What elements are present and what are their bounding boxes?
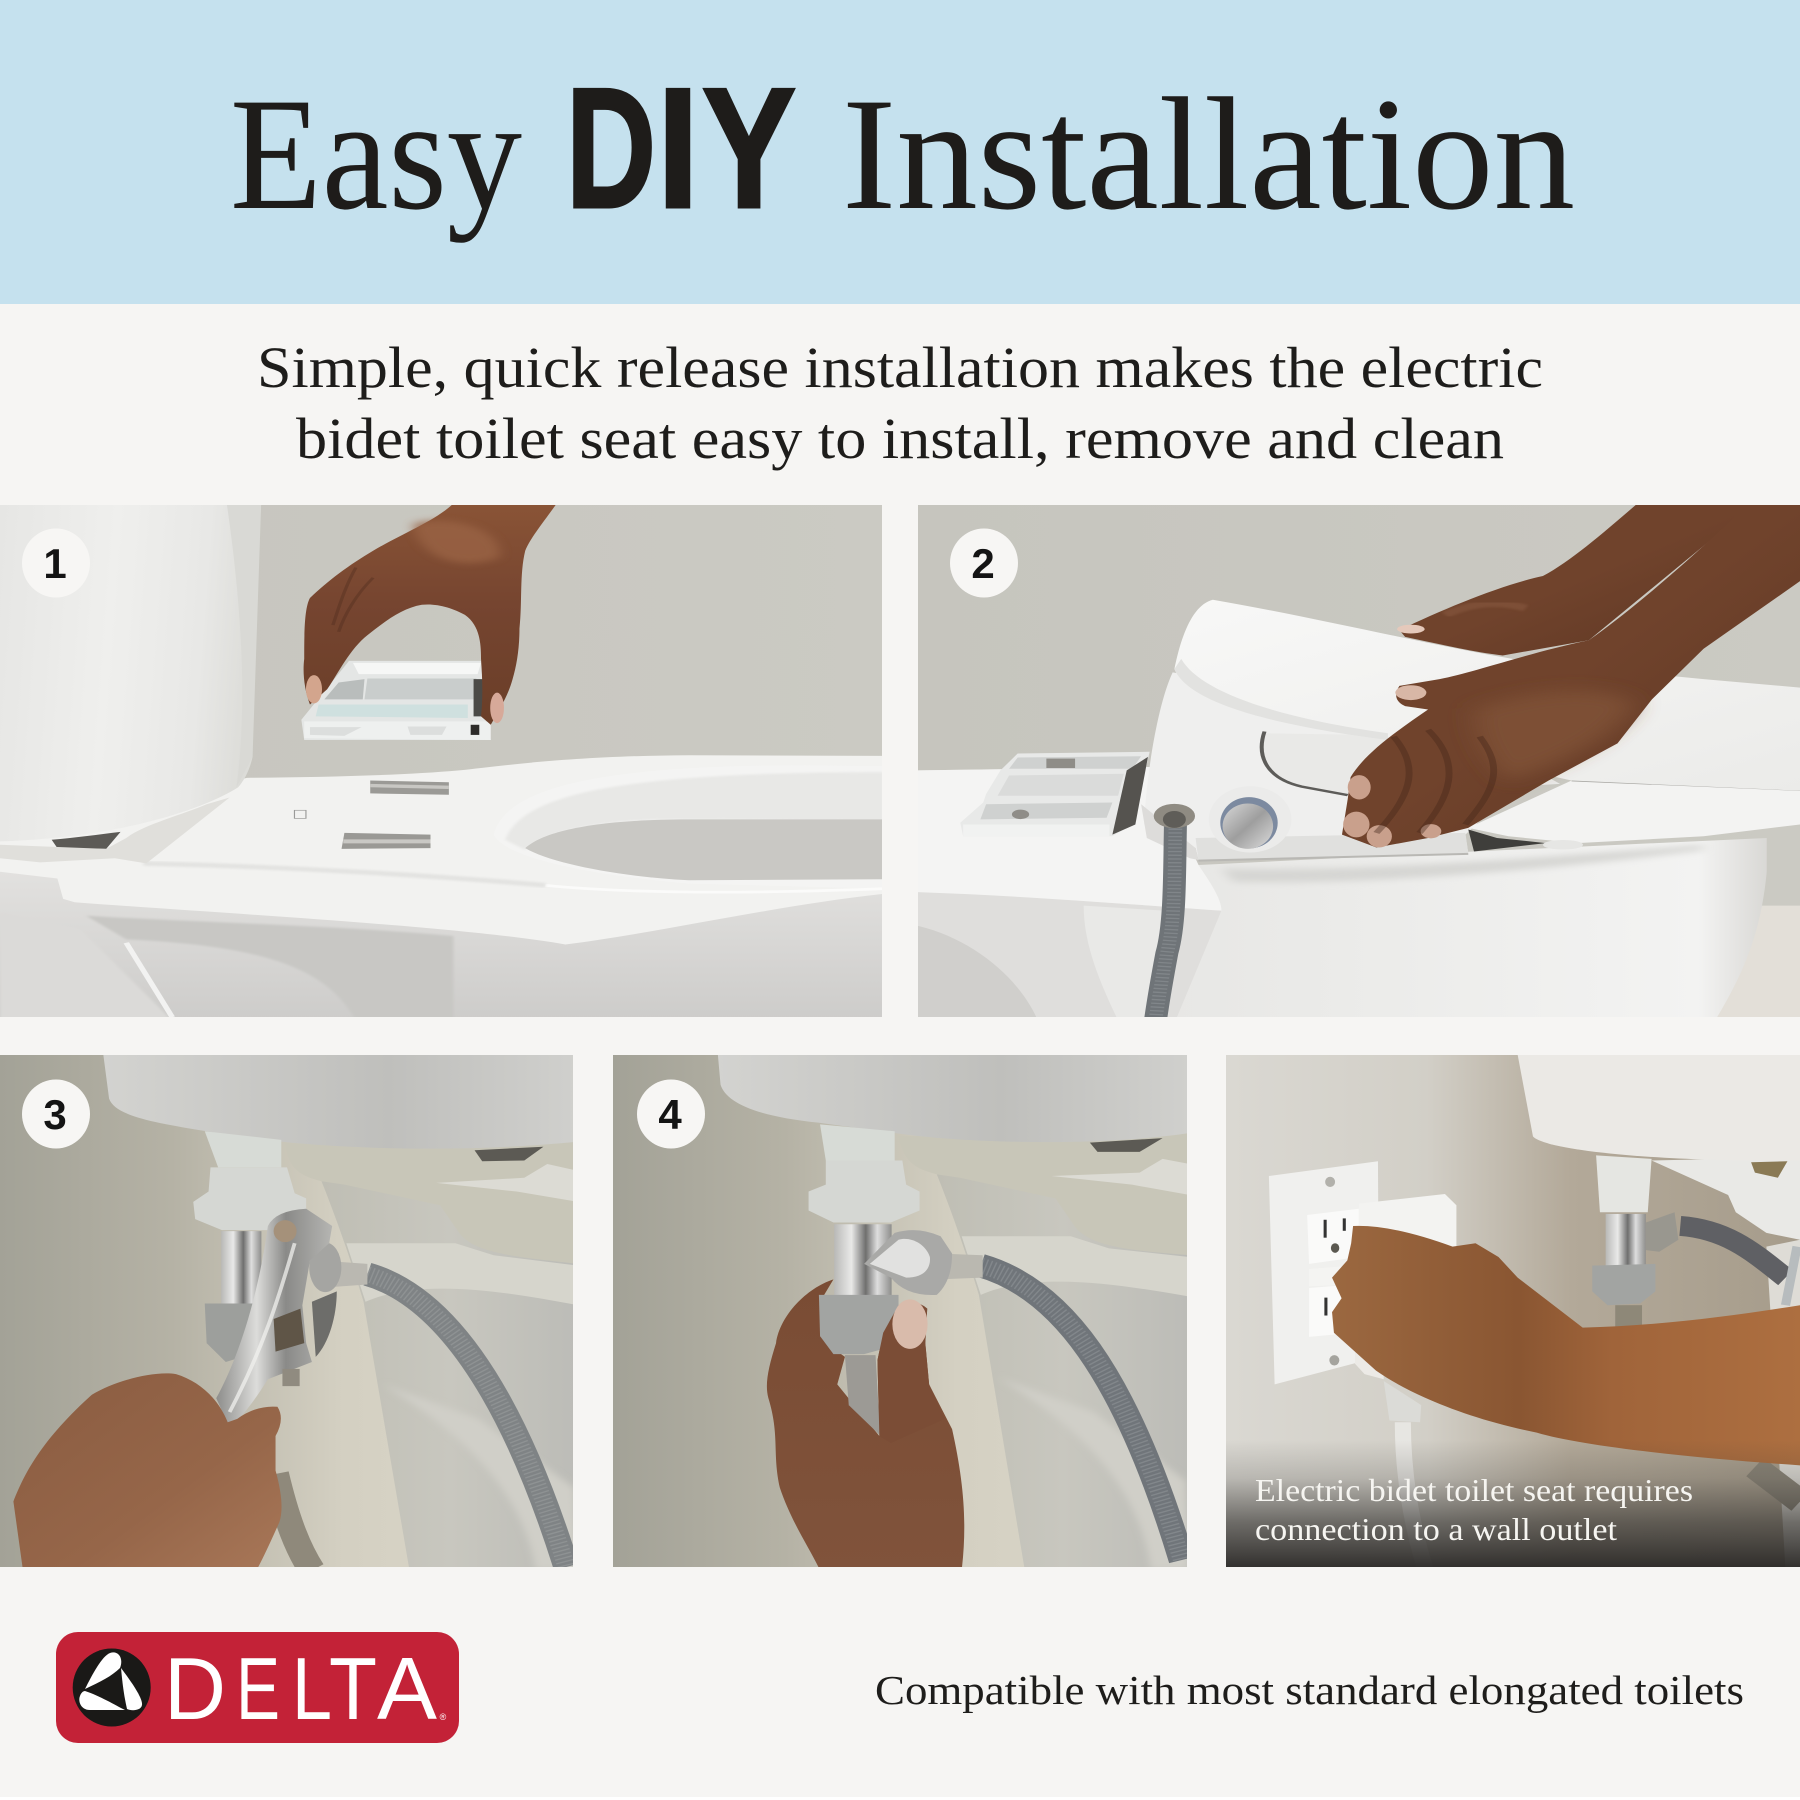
toilet tank — [0, 503, 261, 841]
thumb and nail — [878, 1300, 931, 1436]
caption gradient — [1226, 1440, 1800, 1567]
toilet tank — [103, 1055, 578, 1149]
adjustable wrench — [216, 1209, 341, 1427]
title: D — [566, 53, 656, 244]
braided hose — [276, 1260, 566, 1570]
panel: step 3 photo — [0, 1055, 578, 1570]
bracket held in hand — [301, 661, 491, 740]
step 4 number badge: 4 — [658, 1091, 682, 1138]
front hand and arm — [1342, 503, 1800, 847]
bracket on deck — [960, 752, 1150, 836]
title: Y — [702, 53, 796, 244]
toilet pedestal and deck — [322, 1142, 573, 1567]
panel: step 5 photo with caption — [1226, 1055, 1800, 1570]
title: Installation — [842, 65, 1575, 243]
logo wordmark: E — [236, 1639, 280, 1738]
title: Easy — [230, 65, 522, 243]
logo wordmark — [164, 1639, 437, 1738]
baseboard — [1718, 906, 1800, 1017]
subtitle: Simple, quick release installation makes the electric — [257, 335, 1543, 400]
seat housing — [1141, 672, 1589, 861]
step 2 number badge — [950, 528, 1018, 598]
title: I — [657, 53, 699, 244]
seat rim and lid — [1174, 600, 1800, 852]
hand gripping wrench — [13, 1373, 282, 1570]
caption text: connection to a wall outlet — [1255, 1511, 1617, 1547]
hand and forearm — [1332, 1226, 1800, 1465]
wall outlet — [1269, 1161, 1379, 1384]
logo wordmark: L — [292, 1639, 332, 1738]
toilet pedestal and deck — [936, 1134, 1187, 1567]
bottom edge strip — [0, 1797, 1800, 1800]
title — [230, 53, 1575, 244]
panel: step 2 photo — [918, 503, 1800, 1021]
braided hose — [939, 1254, 1182, 1560]
step 4 number badge — [637, 1080, 705, 1148]
caption text — [1256, 1478, 1692, 1540]
step 1 number badge — [22, 528, 90, 598]
logo wordmark: T — [329, 1639, 377, 1738]
logo emblem — [73, 1648, 151, 1726]
toilet body — [918, 767, 1767, 1021]
toilet deck and bowl — [0, 755, 884, 1021]
valve fittings — [193, 1131, 306, 1362]
Delta logo — [56, 1632, 459, 1743]
compatibility note: Compatible with most standard elongated toilets — [875, 1667, 1744, 1713]
dial knob — [1216, 797, 1285, 852]
valve fittings — [809, 1124, 952, 1435]
subtitle: bidet toilet seat easy to install, remove and clean — [296, 406, 1504, 471]
mounting plates — [294, 781, 449, 849]
step 1 number badge: 1 — [43, 540, 67, 587]
step 3 number badge: 3 — [43, 1091, 67, 1138]
caption text: Electric bidet toilet seat requires — [1255, 1472, 1693, 1508]
panel: step 4 photo — [613, 1055, 1189, 1570]
header band — [0, 0, 1800, 304]
power plug and cord — [1355, 1194, 1456, 1526]
hand holding bracket — [304, 503, 557, 725]
logo wordmark: A — [377, 1639, 437, 1738]
panel: step 1 photo — [0, 503, 884, 1021]
logo wordmark: D — [164, 1639, 226, 1738]
hand behind nut — [767, 1279, 964, 1570]
back hand and arm — [1397, 503, 1755, 655]
subtitle — [257, 335, 1543, 471]
step 3 number badge — [22, 1080, 90, 1148]
water hose — [1154, 804, 1195, 1021]
step 2 number badge: 2 — [971, 540, 995, 587]
toilet tank and fittings — [1518, 1055, 1800, 1570]
toilet tank — [718, 1055, 1189, 1142]
registered mark: ® — [440, 1712, 447, 1722]
